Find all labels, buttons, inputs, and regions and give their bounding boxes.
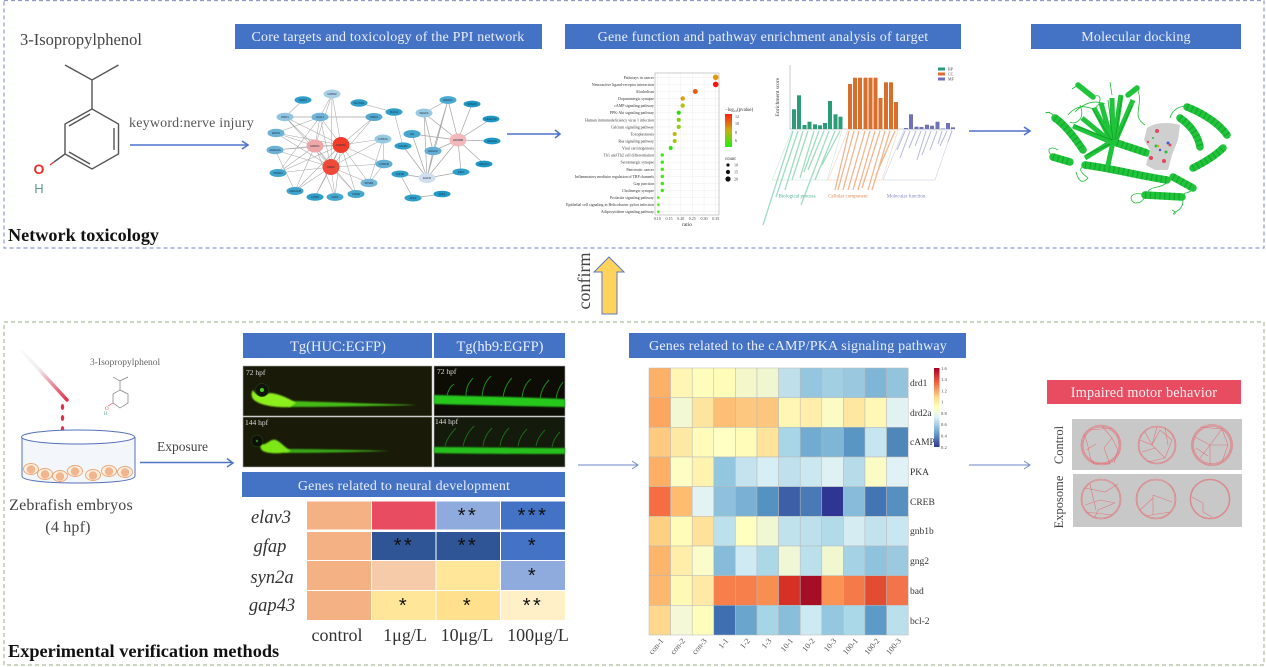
chart: KEGG bubble plot: 15: [734, 170, 738, 174]
image: HUC fish 72 hpf: 72 hpf: [246, 368, 266, 377]
chart: KEGG bubble plot: ratio: [682, 222, 692, 228]
chart: KEGG bubble plot: Toxoplasmosis: [630, 132, 654, 136]
row: elav3: **: [458, 505, 478, 527]
chart: KEGG bubble plot: −log₁₀(pvalue): [725, 108, 754, 113]
row: elav3: [251, 502, 565, 530]
chart: KEGG bubble plot: 12: [735, 114, 739, 119]
chart: PPI network: HDAC4: [479, 162, 489, 166]
chart: KEGG bubble plot: cAMP signaling pathway: [614, 103, 654, 108]
column labels: 10-2: [800, 637, 817, 654]
color scale: 1.2: [941, 388, 947, 394]
chart: KEGG bubble plot: Calcium signaling pathway: [611, 124, 654, 129]
chart: control group tracks: [1072, 419, 1242, 470]
color scale: 0.2: [941, 445, 947, 450]
row: gfap: [254, 532, 565, 560]
chart: KEGG bubble plot: Ras signaling pathway: [618, 138, 654, 144]
chart: PPI network: ADRA1B: [289, 189, 301, 193]
column labels: 100-1: [841, 637, 860, 657]
panel: experimental verification frame: [4, 322, 1264, 665]
chart: GO enrichment bar chart: Enrichment score: [775, 77, 781, 116]
bars: molecular function: [904, 114, 955, 129]
chart: KEGG bubble plot: 0.20: [677, 216, 684, 221]
text: keyword nerve injury: keyword:nerve injury: [129, 116, 254, 131]
chart: gene expression heatmap: [647, 366, 947, 657]
chart: PPI network: [266, 90, 500, 202]
icon: pipette: [23, 352, 67, 400]
chart: KEGG bubble plot: Neuroactive ligand-receptor interaction: [592, 82, 654, 87]
chart: KEGG bubble plot: Cholinergic synapse: [622, 188, 654, 193]
chart: GO enrichment bar chart: [763, 65, 955, 225]
chart: KEGG bubble plot: [566, 73, 754, 228]
chart: KEGG bubble plot: PPK-Akt signaling pathway: [610, 110, 654, 115]
column labels: control: [312, 625, 362, 645]
chart: GO enrichment bar chart: BP: [948, 66, 954, 72]
row: gap43: *: [399, 595, 409, 617]
column labels: 1-2: [738, 637, 752, 650]
label: exposome: Exposome: [1052, 475, 1066, 528]
chart: KEGG bubble plot: Serotonergic synapse: [620, 160, 654, 165]
chart: GO enrichment bar chart: CC: [948, 72, 954, 76]
row: gfap: **: [394, 535, 414, 557]
chart: PPI network: IGF1R: [396, 172, 404, 176]
image: HUC fish 144 hpf: [243, 417, 432, 467]
row: gfap: gfap: [254, 537, 286, 557]
arrow: network to enrichment: [507, 130, 560, 138]
heading: impaired motor behavior: [1047, 380, 1241, 404]
column labels: con-3: [690, 637, 709, 656]
chart: PPI network: GCH1: [316, 115, 324, 119]
chart: PPI network: JAK1: [439, 192, 446, 196]
column labels: 10μg/L: [441, 625, 493, 645]
arrow: exposure: [140, 458, 233, 467]
row labels: drd2a: [910, 409, 932, 419]
chart: GO enrichment bar chart: Molecular function: [887, 194, 926, 200]
column labels: con-2: [669, 637, 687, 656]
icon: small molecule: [104, 377, 128, 417]
chart: KEGG bubble plot: Epithelial cell signaling in Helicobacter pylori infection: [566, 202, 654, 207]
image: hb9 trunk 144 hpf: [434, 417, 565, 467]
chart: KEGG bubble plot: 10: [734, 162, 738, 168]
chart: PPI network: HDAC6: [487, 139, 497, 143]
heading: gene function: Gene function and pathway enrichment analysis of target: [598, 30, 928, 45]
row: gap43: *: [463, 595, 473, 617]
chart: PPI network: MAPK1: [310, 144, 320, 148]
row: syn2a: [250, 561, 565, 590]
heading: gene function: [565, 24, 961, 49]
arrow: confirm up arrow: [594, 257, 624, 314]
bars: biological process: [792, 95, 842, 129]
chart: PPI network: EIF2: [458, 170, 464, 174]
chart: KEGG bubble plot: Human immunodeficiency virus 1 infection: [585, 117, 654, 122]
bars: cellular component: [848, 78, 898, 129]
color scale: 1.4: [941, 377, 947, 382]
panel: network toxicology frame: [4, 0, 1264, 248]
row: gap43: **: [523, 595, 543, 617]
row: elav3: elav3: [251, 508, 291, 528]
arrow: molecule to network: [130, 141, 248, 149]
chart: PPI network: HTR1B: [379, 162, 389, 166]
column labels: 100-3: [884, 637, 903, 657]
heading: core targets: [235, 24, 542, 49]
chart: KEGG bubble plot: Pancreatic cancer: [626, 167, 655, 172]
heading: Tg(HUC:EGFP): Tg(HUC:EGFP): [290, 339, 386, 355]
chart: KEGG bubble plot: 0.15: [666, 216, 672, 221]
chart: PPI network: HDAC2: [428, 149, 438, 153]
row labels: CREB: [910, 498, 935, 508]
chart: KEGG bubble plot: Pathways in cancer: [624, 75, 655, 80]
row labels: gng2: [910, 557, 929, 567]
chart: KEGG bubble plot: 0.10: [654, 216, 661, 221]
column labels: 100-2: [863, 637, 882, 657]
icon: small molecule: O: [105, 407, 109, 412]
row: syn2a: *: [528, 565, 538, 587]
chart: KEGG bubble plot: 6: [735, 138, 737, 143]
row: elav3: ***: [518, 505, 548, 527]
chart: PPI network: SDMA5: [467, 102, 477, 106]
heading: network toxicology: Network toxicology: [8, 225, 159, 245]
icon: small molecule: H: [104, 412, 108, 417]
chart: GO enrichment bar chart: Cellular component: [828, 194, 868, 200]
chart: GO enrichment bar chart: Biological process: [778, 194, 816, 200]
column labels: con-1: [647, 637, 666, 656]
row labels: cAMP: [910, 438, 935, 448]
heading: molecular docking: Molecular docking: [1081, 30, 1191, 45]
arrow: enrichment to docking: [969, 127, 1030, 135]
chart: PPI network: ADRA2A: [269, 148, 281, 152]
chart: PPI network: DRD2: [327, 165, 335, 169]
text: exposure: Exposure: [157, 439, 208, 454]
chart: KEGG bubble plot: count: [725, 157, 736, 162]
heading: experimental verification methods: Experimental verification methods: [8, 641, 279, 661]
chart: PPI network: MAPK3: [336, 143, 346, 147]
chart: PPI network: OPRD1: [273, 171, 283, 175]
chart: KEGG bubble plot: Adipocytokine signaling pathway: [601, 209, 654, 214]
heading: genes related to neural development: Genes related to neural development: [298, 479, 510, 494]
heading: Tg(hb9:EGFP): [434, 333, 565, 358]
chart: PPI network: DRD4: [299, 98, 307, 102]
chart: KEGG bubble plot: Th1 and Th2 cell differentiation: [604, 152, 654, 158]
chart: PPI network: VEGFA: [419, 111, 429, 115]
icon: falling drops: [61, 404, 64, 432]
chart: PPI network: EDOS: [272, 131, 280, 135]
chart: KEGG bubble plot: 8: [735, 130, 737, 135]
row labels: drd1: [910, 379, 928, 389]
arrow: images to heatmap: [578, 461, 638, 469]
chart: KEGG bubble plot: Dopaminergic synapse: [618, 96, 654, 101]
chart: PPI network: JAK2: [410, 196, 417, 200]
row labels: [910, 379, 935, 627]
column labels: 1μg/L: [383, 625, 427, 645]
label: confirm: confirm: [574, 253, 594, 309]
chart: PPI network: SPSB1: [364, 181, 374, 185]
chart: PPI network: HDAC10: [485, 117, 497, 121]
chart: KEGG bubble plot: 0.30: [700, 216, 708, 221]
image: HUC fish 72 hpf: [243, 366, 432, 416]
heading: molecular docking: [1031, 24, 1241, 49]
chart: KEGG bubble plot: Alcoholism: [636, 89, 654, 94]
column labels: [312, 625, 569, 645]
chart: PPI network: CALM1: [398, 144, 408, 148]
heading: 3-Isopropylphenol: 3-Isopropylphenol: [20, 30, 142, 49]
row: gap43: gap43: [249, 596, 295, 616]
heading: impaired motor behavior: Impaired motor behavior: [1071, 385, 1217, 401]
color scale: 0.6: [941, 422, 947, 427]
chart: PPI network: CAV1: [331, 195, 339, 199]
row: syn2a: syn2a: [250, 568, 294, 588]
row labels: bad: [910, 587, 924, 597]
chart: PPI network: DRD3: [370, 115, 378, 119]
row: gap43: [249, 591, 565, 620]
image: hb9 trunk 144 hpf: 144 hpf: [435, 417, 459, 426]
chart: KEGG bubble plot: Viral carcinogenesis: [622, 146, 654, 150]
icon: 3-isopropylphenol molecule: O: [34, 161, 45, 177]
image: docked protein structure: [1046, 82, 1227, 214]
chart: PPI network: LTA4H: [352, 192, 360, 196]
heading: cAMP/PKA genes: [629, 333, 966, 358]
color scale: [934, 366, 947, 450]
heading: genes related to neural development: [242, 472, 565, 497]
chart: KEGG bubble plot: Gap junction: [634, 181, 654, 186]
row labels: PKA: [910, 468, 929, 478]
image: hb9 trunk 72 hpf: [434, 366, 565, 416]
icon: 3-isopropylphenol molecule: H: [34, 181, 44, 196]
row: gfap: **: [458, 535, 478, 557]
heading: core targets: Core targets and toxicology of the PPI network: [252, 30, 524, 45]
chart: KEGG bubble plot: 20: [734, 176, 738, 182]
column labels: 1-1: [717, 637, 730, 650]
chart: PPI network: AR: [410, 132, 414, 136]
chart: KEGG bubble plot: 0.35: [712, 216, 719, 221]
chart: KEGG bubble plot: Inflammatory mediator regulation of TRP channels: [575, 174, 654, 179]
color scale: 1.6: [941, 366, 947, 371]
column labels: [647, 637, 903, 657]
chart: PPI network: HDORB: [453, 138, 463, 142]
icon: 3-isopropylphenol molecule: [34, 65, 118, 196]
chart: PPI network: HDAC1: [443, 98, 453, 102]
column labels: 10-3: [822, 637, 838, 654]
chart: KEGG bubble plot: 0.25: [689, 216, 696, 221]
arrow: heatmap to behavior: [969, 461, 1030, 469]
chart: PPI network: GPR52: [327, 92, 337, 96]
row labels: bcl-2: [910, 617, 930, 627]
heading: Tg(HUC:EGFP): [243, 333, 432, 358]
table: neural development gene expression: [249, 502, 569, 645]
chart: PPI network: HTR6: [311, 195, 319, 199]
image: HUC fish 144 hpf: 144 hpf: [245, 418, 269, 427]
row labels: gnb1b: [910, 527, 934, 537]
chart: PPI network: MAOA: [390, 110, 398, 114]
chart: KEGG bubble plot: 10: [735, 121, 739, 126]
color scale: 0.4: [941, 434, 947, 438]
text: zebrafish embryos caption: (4 hpf): [45, 519, 91, 536]
column labels: 1-3: [760, 637, 774, 650]
image: hb9 trunk 72 hpf: 72 hpf: [437, 367, 457, 376]
chart: KEGG bubble plot: Prolactin signaling pathway: [610, 195, 654, 200]
text: zebrafish embryos caption: [9, 497, 133, 536]
heading: cAMP/PKA genes: Genes related to the cAMP/PKA signaling pathway: [649, 339, 947, 354]
column labels: 10-1: [779, 637, 795, 654]
icon: petri dish with embryos: [22, 430, 135, 483]
chart: PPI network: DRD1: [281, 115, 289, 119]
text: zebrafish embryos caption: Zebrafish embryos: [9, 497, 133, 514]
column labels: 100μg/L: [507, 625, 569, 645]
color scale: 0.8: [941, 411, 947, 416]
chart: PPI network: HTR2A: [378, 137, 388, 141]
chart: PPI network: SLC6A3: [354, 101, 365, 105]
chart: GO enrichment bar chart: MF: [948, 76, 955, 82]
text: small compound name: 3-Isopropylphenol: [90, 358, 161, 368]
chart: PPI network: EGFR: [423, 176, 431, 180]
label: control: Control: [1052, 425, 1066, 464]
row: gfap: *: [528, 535, 538, 557]
heading: Tg(hb9:EGFP): Tg(hb9:EGFP): [456, 339, 544, 355]
chart: exposure group tracks: [1073, 474, 1242, 527]
color scale: 1: [941, 400, 944, 404]
